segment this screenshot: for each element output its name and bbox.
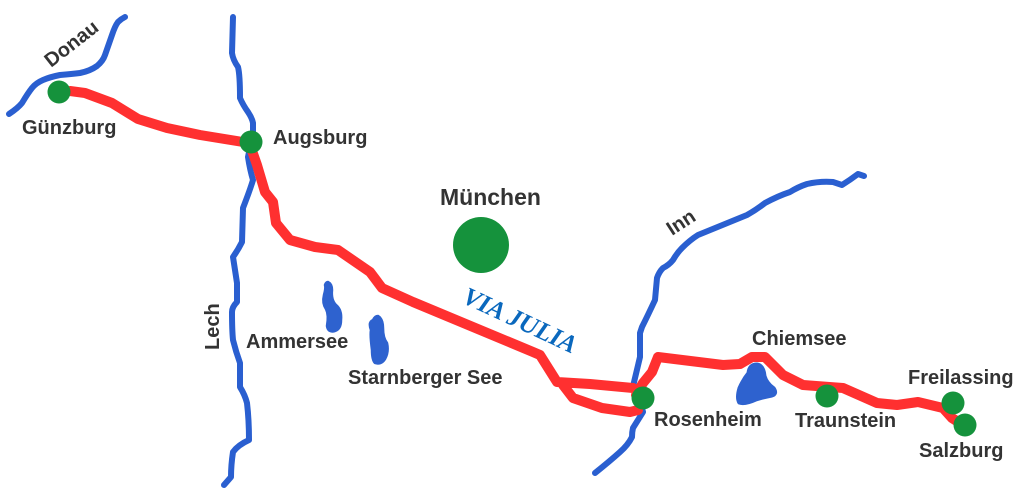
lake: Chiemsee (738, 364, 776, 404)
city marker: Rosenheim (632, 386, 654, 410)
city marker: Augsburg (240, 130, 262, 154)
city marker: Traunstein (816, 384, 838, 408)
label: Starnberger See: Starnberger See (348, 367, 503, 389)
label: Lech: Lech (202, 303, 224, 350)
label: München: München (440, 184, 541, 210)
city marker: München (453, 217, 509, 273)
label: Günzburg: Günzburg (22, 117, 116, 139)
lake: Starnberger See (370, 316, 388, 364)
label: Donau: Donau (41, 16, 103, 72)
label: Ammersee: Ammersee (246, 331, 348, 353)
city marker: Günzburg (48, 80, 70, 104)
city marker: Freilassing (942, 392, 964, 414)
label: Augsburg: Augsburg (273, 127, 367, 149)
river: Lech (224, 17, 253, 485)
label: Via Julia: VIA JULIA (458, 281, 582, 359)
river: Donau (9, 17, 125, 114)
label: Traunstein: Traunstein (795, 410, 896, 432)
label: Inn: Inn (663, 205, 700, 240)
label: Salzburg: Salzburg (919, 440, 1003, 462)
lake: Ammersee (323, 282, 341, 331)
label: Rosenheim: Rosenheim (654, 409, 762, 431)
city marker: Salzburg (954, 414, 976, 436)
label: Freilassing: Freilassing (908, 367, 1014, 389)
river: Inn (595, 174, 864, 473)
label: Chiemsee: Chiemsee (752, 328, 846, 350)
route: Via Julia (70, 91, 963, 425)
